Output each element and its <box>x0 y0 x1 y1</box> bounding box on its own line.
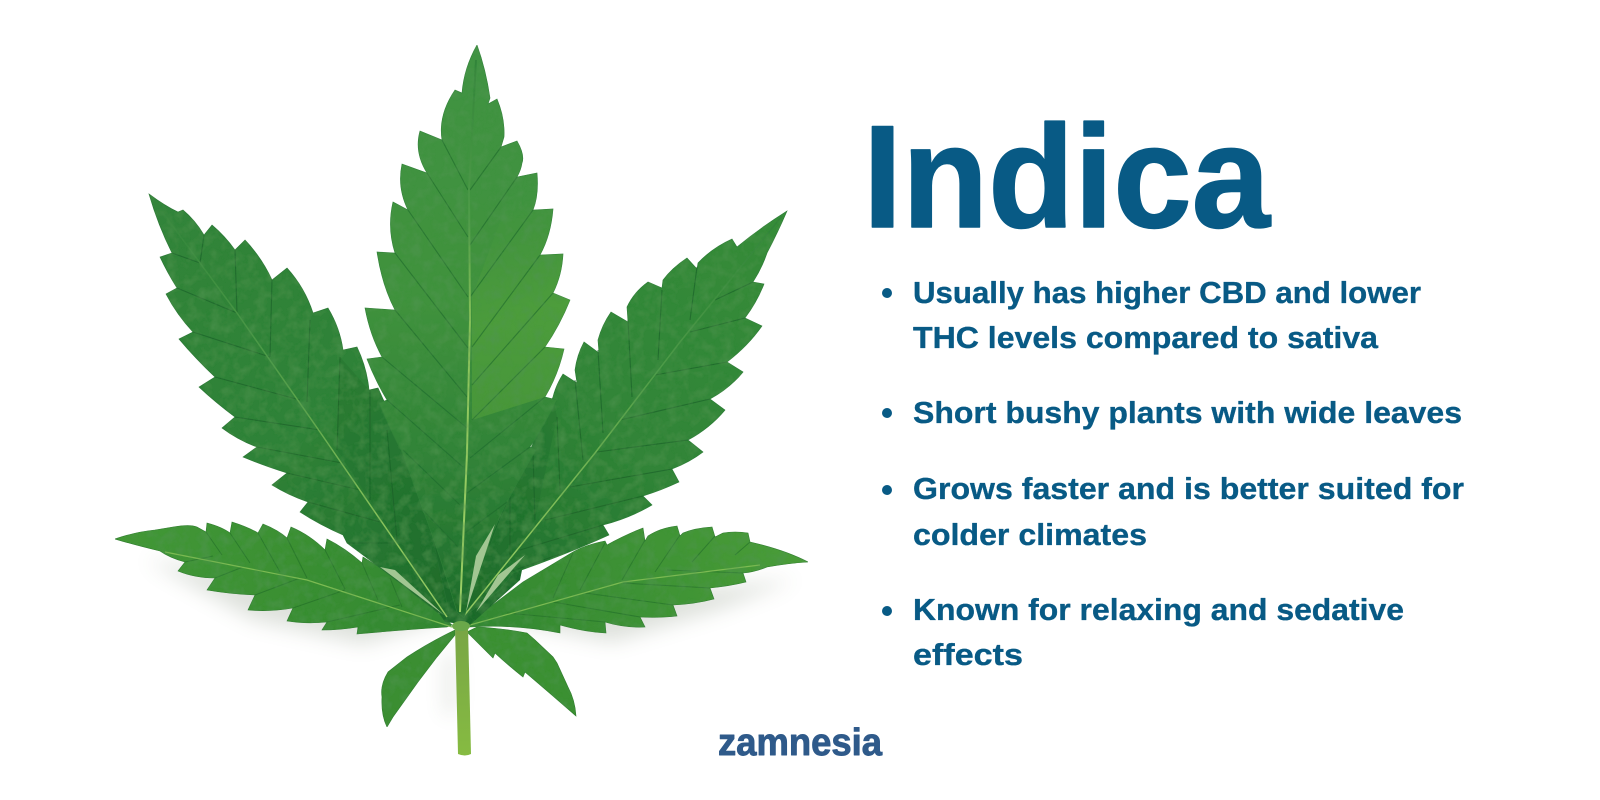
bullet list <box>882 275 1464 672</box>
leaflet: centre <box>365 45 570 618</box>
bullet 4: effects <box>913 637 1023 672</box>
leaflet: lower left <box>115 522 452 634</box>
bullet 4 <box>882 592 1404 672</box>
leaflet: upper right <box>463 211 787 617</box>
leaflet: lower right <box>470 526 808 633</box>
icon: cannabis leaf <box>115 45 808 756</box>
title: Indica <box>863 95 1272 258</box>
stem <box>455 626 471 756</box>
bullet 3: colder climates <box>913 517 1147 552</box>
leaflet: upper left <box>149 194 450 617</box>
brand logo: zamnesia: zamnesia <box>718 722 883 764</box>
leaflet: small lower right <box>467 627 576 716</box>
bullet 4: Known for relaxing and sedative <box>913 592 1404 627</box>
bullet 3: Grows faster and is better suited for <box>913 471 1464 506</box>
bullet 1: THC levels compared to sativa <box>913 320 1379 355</box>
base filler behind the leaflets <box>400 480 540 625</box>
bullet 1: Usually has higher CBD and lower <box>913 275 1421 310</box>
leaf soft shadow <box>146 559 796 714</box>
leaflet: small lower left <box>382 630 455 727</box>
leaf blades <box>115 45 808 727</box>
leaf junction <box>452 621 470 631</box>
pale slivers between leaflets near base <box>380 524 525 615</box>
bullet 2: Short bushy plants with wide leaves <box>913 395 1462 430</box>
bullet 1 <box>882 275 1421 355</box>
bullet 3 <box>882 471 1464 552</box>
